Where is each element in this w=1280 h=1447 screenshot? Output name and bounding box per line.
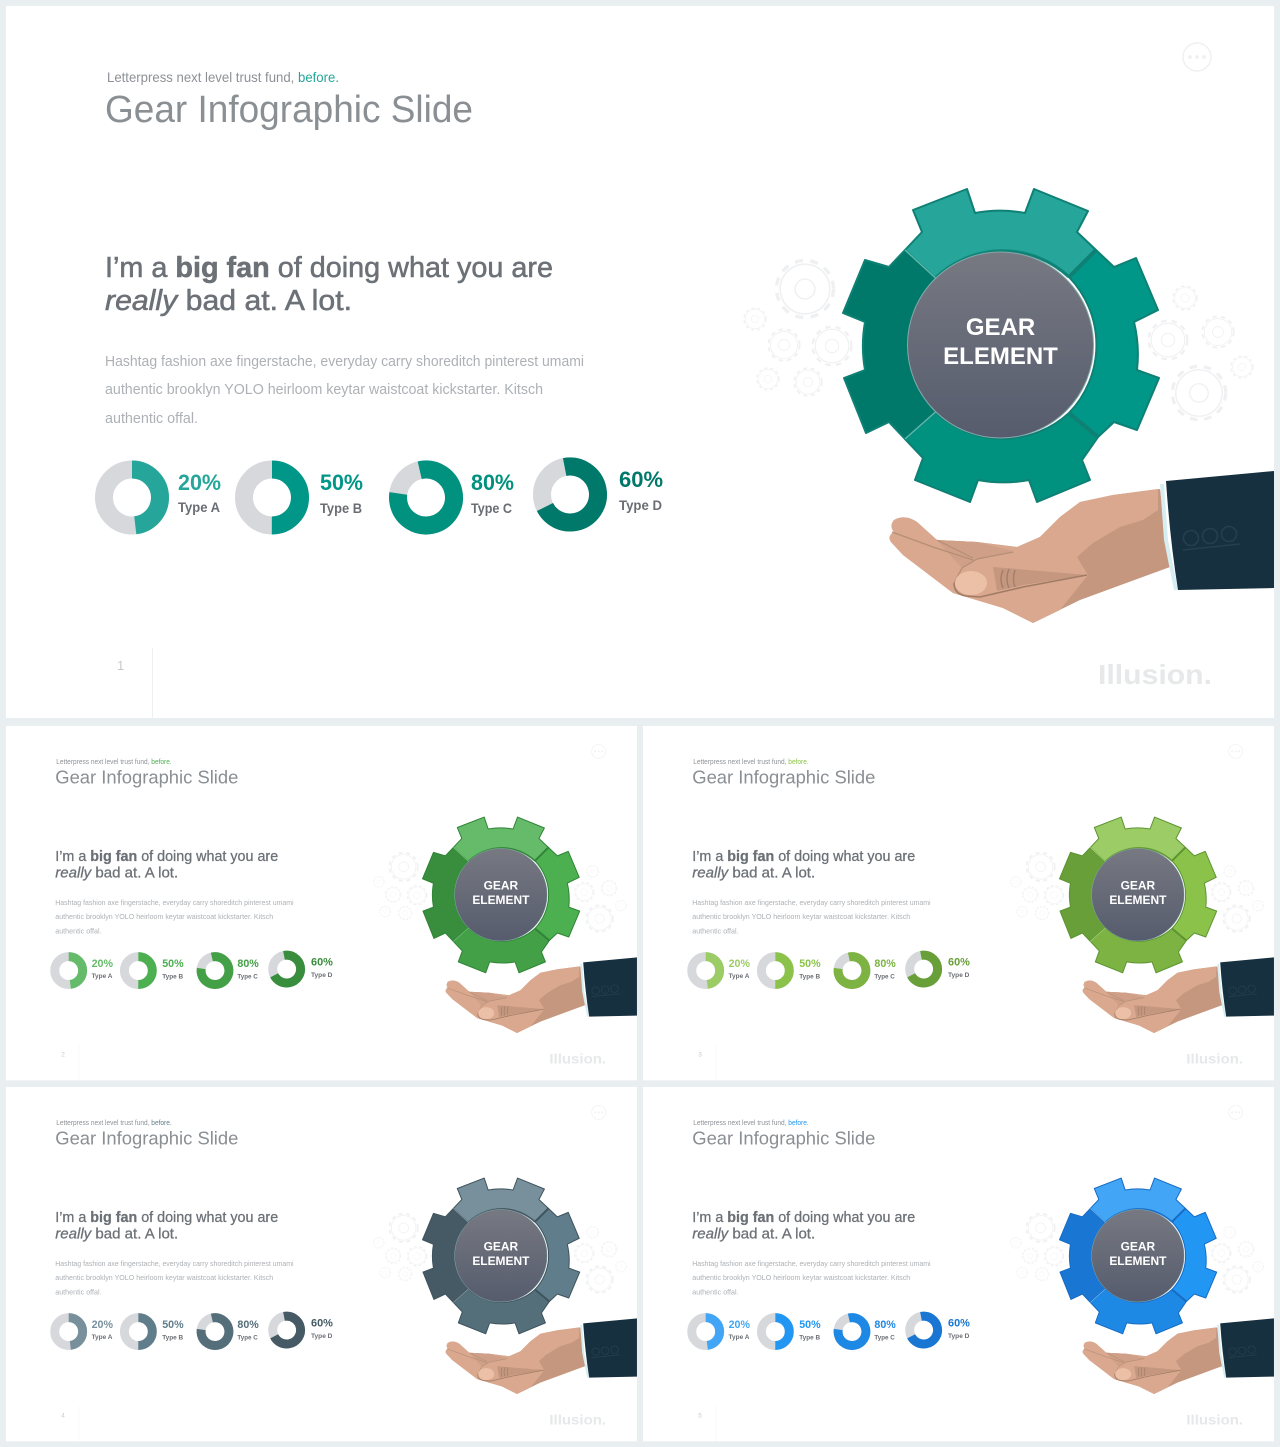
icon: jacket sleeve — [1162, 471, 1274, 590]
body text: authentic brooklyn YOLO heirloom keytar waistcoat kickstarter. Kitsch — [692, 912, 910, 921]
headline: really bad at. A lot. — [55, 1226, 178, 1242]
donut chart: Type B: Type B — [162, 973, 183, 980]
headline — [692, 1210, 915, 1242]
icon: gear: GEAR — [1121, 1240, 1155, 1254]
donut chart: Type A: Type A — [92, 973, 113, 980]
donut chart: Type B — [124, 1318, 184, 1346]
donut chart: Type D — [907, 953, 970, 985]
headline: really bad at. A lot. — [692, 865, 815, 881]
body text: authentic brooklyn YOLO heirloom keytar waistcoat kickstarter. Kitsch — [692, 1273, 910, 1282]
donut chart: Type C: Type C — [237, 973, 258, 980]
icon: gear: ELEMENT — [472, 1254, 530, 1268]
donut chart: Type C: 80% — [237, 958, 259, 970]
icon: gear: GEAR — [484, 879, 518, 893]
donut chart: Type C — [198, 1315, 259, 1348]
donut chart: Type B: Type B — [320, 501, 362, 516]
body text: authentic brooklyn YOLO heirloom keytar waistcoat kickstarter. Kitsch — [105, 381, 543, 398]
donut chart: Type B: 50% — [799, 1319, 821, 1331]
panel: main teal slide — [6, 6, 1274, 718]
donut chart: Type B: 50% — [162, 1319, 184, 1331]
donut chart: Type A: 20% — [729, 1319, 750, 1331]
headline: I’m a big fan of doing what you are — [55, 849, 278, 865]
donut chart: Type A: 20% — [92, 958, 113, 970]
title: Gear Infographic Slide — [55, 1129, 238, 1150]
donut chart: Type B — [244, 470, 363, 526]
donut chart: Type B: Type B — [799, 973, 820, 980]
icon: gear: GEAR — [484, 1240, 518, 1254]
donut chart: Type C — [198, 954, 259, 987]
page number: 4 — [61, 1412, 65, 1419]
icon: gear — [422, 817, 580, 973]
icon: menu dots — [1183, 43, 1211, 71]
donut chart: Type C: 80% — [874, 958, 896, 970]
headline: I’m a big fan of doing what you are — [55, 1210, 278, 1226]
icons: faint background gears — [373, 853, 627, 932]
donut chart: Type D: 60% — [311, 1317, 333, 1329]
donut chart: Type A: Type A — [92, 1334, 113, 1341]
donut chart: Type D — [270, 1314, 333, 1346]
body text: authentic brooklyn YOLO heirloom keytar waistcoat kickstarter. Kitsch — [55, 1273, 273, 1282]
body text: authentic offal. — [55, 1287, 102, 1296]
headline — [55, 1210, 278, 1242]
donut chart: Type A: Type A — [729, 973, 750, 980]
donut chart: Type B — [761, 957, 821, 985]
body text — [692, 1259, 931, 1296]
donut chart: Type D — [907, 1314, 970, 1346]
panel: slate slide — [6, 1087, 637, 1441]
donut chart: Type B: Type B — [799, 1334, 820, 1341]
icon: menu dots — [1229, 1105, 1243, 1119]
icons: faint background gears — [744, 260, 1253, 420]
body text: Hashtag fashion axe fingerstache, everyday carry shoreditch pinterest umami — [55, 898, 294, 907]
donut chart: Type A — [55, 957, 113, 985]
donut chart: Type B: 50% — [799, 958, 821, 970]
icon: jacket sleeve — [581, 957, 637, 1017]
body text: Hashtag fashion axe fingerstache, everyday carry shoreditch pinterest umami — [692, 1259, 931, 1268]
icon: menu dots — [592, 1105, 606, 1119]
pre-title: Letterpress next level trust fund, before. — [693, 759, 809, 766]
pre-title: Letterpress next level trust fund, before. — [56, 1120, 172, 1127]
title: Gear Infographic Slide — [105, 89, 473, 131]
icon: hand — [1083, 966, 1222, 1033]
pre-title: Letterpress next level trust fund, before. — [107, 69, 339, 85]
icon: menu dots — [592, 744, 606, 758]
body text: authentic offal. — [692, 1287, 739, 1296]
brand logo: Illusion. — [1098, 659, 1212, 690]
donut chart: Type C — [835, 954, 896, 987]
donut chart: Type D: 60% — [311, 956, 333, 968]
icon: jacket sleeve — [1218, 1318, 1274, 1378]
body text — [55, 1259, 294, 1296]
icon: hand — [446, 966, 585, 1033]
donut chart: Type D: Type D — [311, 972, 333, 979]
donut chart: Type D: 60% — [948, 1317, 970, 1329]
icon: gear — [843, 189, 1159, 502]
icon: hand — [890, 489, 1170, 623]
donut chart: Type A: 20% — [729, 958, 750, 970]
body text: Hashtag fashion axe fingerstache, everyday carry shoreditch pinterest umami — [105, 353, 584, 370]
headline: I’m a big fan of doing what you are — [692, 1210, 915, 1226]
donut chart: Type C: 80% — [471, 470, 514, 495]
headline: really bad at. A lot. — [692, 1226, 815, 1242]
donut chart: Type D: Type D — [948, 972, 970, 979]
page number: 1 — [117, 658, 124, 673]
icon: gear — [1059, 817, 1217, 973]
body text: Hashtag fashion axe fingerstache, everyday carry shoreditch pinterest umami — [692, 898, 931, 907]
donut chart: Type B — [124, 957, 184, 985]
donut chart: Type C: Type C — [874, 973, 895, 980]
icon: hand — [1083, 1327, 1222, 1394]
donut chart: Type D: Type D — [619, 498, 662, 513]
icon: gear — [422, 1178, 580, 1334]
donut chart: Type C: 80% — [874, 1319, 896, 1331]
donut chart: Type D: 60% — [948, 956, 970, 968]
icon: gear: ELEMENT — [1109, 893, 1167, 907]
donut chart: Type B: 50% — [162, 958, 184, 970]
donut chart: Type C: Type C — [471, 501, 512, 516]
donut chart: Type B: 50% — [320, 470, 363, 495]
icon: gear: ELEMENT — [943, 343, 1058, 370]
title: Gear Infographic Slide — [692, 1129, 875, 1150]
headline: really bad at. A lot. — [55, 865, 178, 881]
body text: authentic offal. — [55, 926, 102, 935]
donut chart: Type C: Type C — [874, 1334, 895, 1341]
donut chart: Type C — [835, 1315, 896, 1348]
icon: gear: ELEMENT — [472, 893, 530, 907]
title: Gear Infographic Slide — [692, 768, 875, 789]
headline — [692, 849, 915, 881]
donut chart: Type D: Type D — [948, 1333, 970, 1340]
headline: I’m a big fan of doing what you are — [105, 252, 553, 284]
donut chart: Type D — [537, 462, 663, 527]
donut chart: Type A — [104, 470, 221, 526]
icons: faint background gears — [1010, 853, 1264, 932]
panel: light green slide — [643, 726, 1274, 1080]
donut chart: Type B — [761, 1318, 821, 1346]
headline: really bad at. A lot. — [105, 285, 352, 317]
donut chart: Type D: Type D — [311, 1333, 333, 1340]
body text — [55, 898, 294, 935]
icon: hand — [446, 1327, 585, 1394]
donut chart: Type A — [692, 957, 750, 985]
donut chart: Type A: Type A — [729, 1334, 750, 1341]
body text — [692, 898, 931, 935]
donut chart: Type A: Type A — [178, 500, 220, 515]
body text — [105, 353, 584, 427]
icon: gear: ELEMENT — [1109, 1254, 1167, 1268]
donut chart: Type B: Type B — [162, 1334, 183, 1341]
page number: 2 — [61, 1051, 65, 1058]
brand logo: Illusion. — [549, 1411, 606, 1427]
brand logo: Illusion. — [1186, 1411, 1243, 1427]
page number: 3 — [698, 1051, 702, 1058]
body text: authentic offal. — [692, 926, 739, 935]
donut chart: Type C — [392, 464, 514, 531]
donut chart: Type C: Type C — [237, 1334, 258, 1341]
icon: gear — [1059, 1178, 1217, 1334]
pre-title: Letterpress next level trust fund, before. — [56, 759, 172, 766]
icon: menu dots — [1229, 744, 1243, 758]
donut chart: Type D — [270, 953, 333, 985]
body text: authentic brooklyn YOLO heirloom keytar waistcoat kickstarter. Kitsch — [55, 912, 273, 921]
page number: 5 — [698, 1412, 702, 1419]
panel: blue slide — [643, 1087, 1274, 1441]
panel: green slide — [6, 726, 637, 1080]
icon: jacket sleeve — [581, 1318, 637, 1378]
icon: gear: GEAR — [1121, 879, 1155, 893]
title: Gear Infographic Slide — [55, 768, 238, 789]
pre-title: Letterpress next level trust fund, before. — [693, 1120, 809, 1127]
headline — [105, 252, 553, 317]
headline: I’m a big fan of doing what you are — [692, 849, 915, 865]
brand logo: Illusion. — [1186, 1050, 1243, 1066]
headline — [55, 849, 278, 881]
donut chart: Type A: 20% — [92, 1319, 113, 1331]
body text: Hashtag fashion axe fingerstache, everyday carry shoreditch pinterest umami — [55, 1259, 294, 1268]
icon: jacket sleeve — [1218, 957, 1274, 1017]
icon: gear: GEAR — [966, 314, 1035, 341]
icons: faint background gears — [373, 1214, 627, 1293]
donut chart: Type D: 60% — [619, 467, 663, 492]
donut chart: Type A — [55, 1318, 113, 1346]
icons: faint background gears — [1010, 1214, 1264, 1293]
donut chart: Type A: 20% — [178, 470, 221, 495]
donut chart: Type A — [692, 1318, 750, 1346]
body text: authentic offal. — [105, 410, 198, 427]
brand logo: Illusion. — [549, 1050, 606, 1066]
donut chart: Type C: 80% — [237, 1319, 259, 1331]
